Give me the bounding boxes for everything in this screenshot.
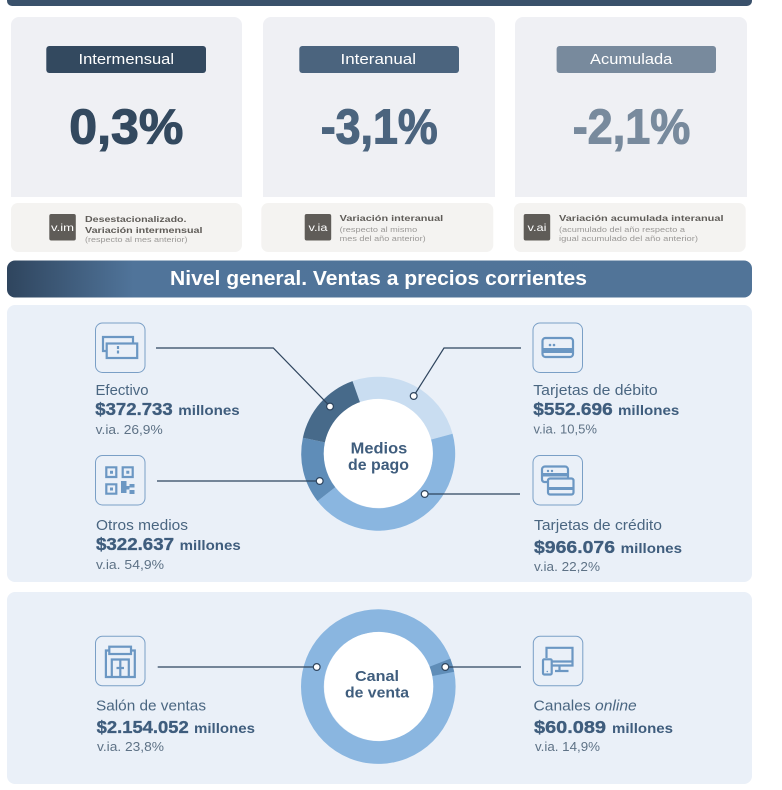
badge: v.ai: [524, 214, 550, 240]
badge: v.ia: [305, 214, 331, 240]
item: tarjetas de débito: Tarjetas de débito: [533, 383, 658, 399]
donut chart: medios de pago: de pago: [348, 457, 409, 474]
note text: v.ia: Variación interanual: [340, 213, 443, 223]
item: tarjetas de crédito: millones: [621, 541, 682, 556]
note: v.ai: [514, 203, 746, 252]
donut chart: canal de venta: [312, 621, 454, 752]
leader line: efectivo: [156, 348, 333, 410]
note text: v.ia: [340, 213, 443, 243]
item: tarjetas de crédito: $966.076: [534, 537, 615, 557]
item: salón de ventas: v.ia. 23,8%: [97, 739, 164, 754]
leader line: tarjetas de crédito: [421, 491, 520, 497]
note text: v.im: Variación intermensual: [85, 225, 202, 235]
leader line: otros medios: [157, 478, 323, 484]
donut chart: medios de pago: [301, 377, 455, 531]
item: salón de ventas: Salón de ventas: [96, 699, 206, 715]
note text: v.ai: [559, 213, 724, 243]
section heading: [7, 260, 752, 298]
icon: efectivo: [96, 323, 145, 372]
label: intermensual: Intermensual: [78, 52, 174, 68]
label: intermensual: [46, 46, 206, 73]
item: tarjetas de débito: [533, 383, 679, 436]
item: tarjetas de crédito: v.ia. 22,2%: [534, 559, 600, 574]
note: v.im: [11, 203, 242, 252]
item: efectivo: millones: [178, 403, 240, 418]
badge: v.im: v.im: [51, 222, 74, 234]
item: efectivo: Efectivo: [96, 383, 148, 399]
item: canales online: millones: [612, 721, 673, 736]
item: tarjetas de débito: millones: [618, 403, 679, 418]
item: canales online: Canales online: [534, 699, 637, 715]
item: salón de ventas: [96, 699, 255, 754]
badge: v.ia: v.ia: [308, 222, 328, 234]
note text: v.ai: Variación acumulada interanual: [559, 213, 724, 223]
label: acumulada: [557, 46, 716, 73]
icon: canales online: [533, 636, 583, 686]
note text: v.ai: (acumulado del año respecto a: [559, 225, 686, 234]
value: -2,1%: -2,1%: [573, 100, 690, 154]
top header bar: [7, 0, 752, 6]
item: canales online: $60.089: [534, 717, 606, 737]
icon: tarjetas de débito: [533, 323, 582, 372]
leader line: salón de ventas: [158, 664, 320, 670]
section heading: Nivel general. Ventas a precios corrientes: [170, 267, 587, 290]
donut chart: canal de venta: de venta: [345, 685, 410, 702]
panel: intermensual: [11, 17, 242, 197]
value: -3,1%: -3,1%: [321, 100, 438, 154]
item: salón de ventas: millones: [194, 721, 255, 736]
icon: salón de ventas: [96, 636, 145, 686]
value: 0,3%: 0,3%: [69, 100, 183, 154]
item: salón de ventas: $2.154.052: [97, 717, 189, 737]
item: otros medios: $322.637: [96, 534, 174, 554]
badge: v.im: [49, 214, 76, 240]
item: efectivo: [95, 383, 240, 437]
note text: v.ia: (respecto al mismo: [340, 225, 417, 234]
note text: v.im: (respecto al mes anterior): [85, 235, 188, 244]
item: otros medios: Otros medios: [96, 518, 188, 534]
item: efectivo: $372.733: [95, 399, 173, 419]
panel: canal de venta: [7, 592, 752, 784]
item: tarjetas de crédito: [534, 518, 682, 574]
donut chart: medios de pago: Medios: [351, 440, 407, 457]
note text: v.im: [85, 214, 202, 244]
item: tarjetas de débito: v.ia. 10,5%: [534, 422, 597, 436]
badge: v.ai: v.ai: [528, 222, 546, 234]
note text: v.ia: mes del año anterior): [340, 234, 426, 243]
item: canales online: [534, 699, 673, 754]
label: interanual: [299, 46, 459, 73]
item: tarjetas de crédito: Tarjetas de crédito: [534, 518, 662, 534]
icon: otros medios: [96, 456, 145, 505]
item: otros medios: [96, 518, 241, 572]
item: efectivo: v.ia. 26,9%: [96, 422, 163, 437]
item: otros medios: v.ia. 54,9%: [96, 557, 164, 572]
label: acumulada: Acumulada: [590, 52, 673, 68]
panel: acumulada: [515, 17, 747, 197]
donut chart: canal de venta: Canal: [355, 668, 399, 685]
note: v.ia: [261, 203, 493, 252]
note text: v.im: Desestacionalizado.: [85, 214, 186, 224]
icon: tarjetas de crédito: [533, 456, 582, 505]
note text: v.ai: igual acumulado del año anterior): [559, 234, 698, 243]
item: canales online: v.ia. 14,9%: [535, 739, 600, 754]
panel: medios de pago: [7, 305, 752, 582]
label: interanual: Interanual: [340, 52, 416, 68]
leader line: tarjetas de débito: [410, 348, 521, 399]
leader line: canales online: [442, 664, 521, 670]
panel: interanual: [263, 17, 495, 197]
item: otros medios: millones: [180, 538, 241, 553]
item: tarjetas de débito: $552.696: [533, 399, 613, 419]
